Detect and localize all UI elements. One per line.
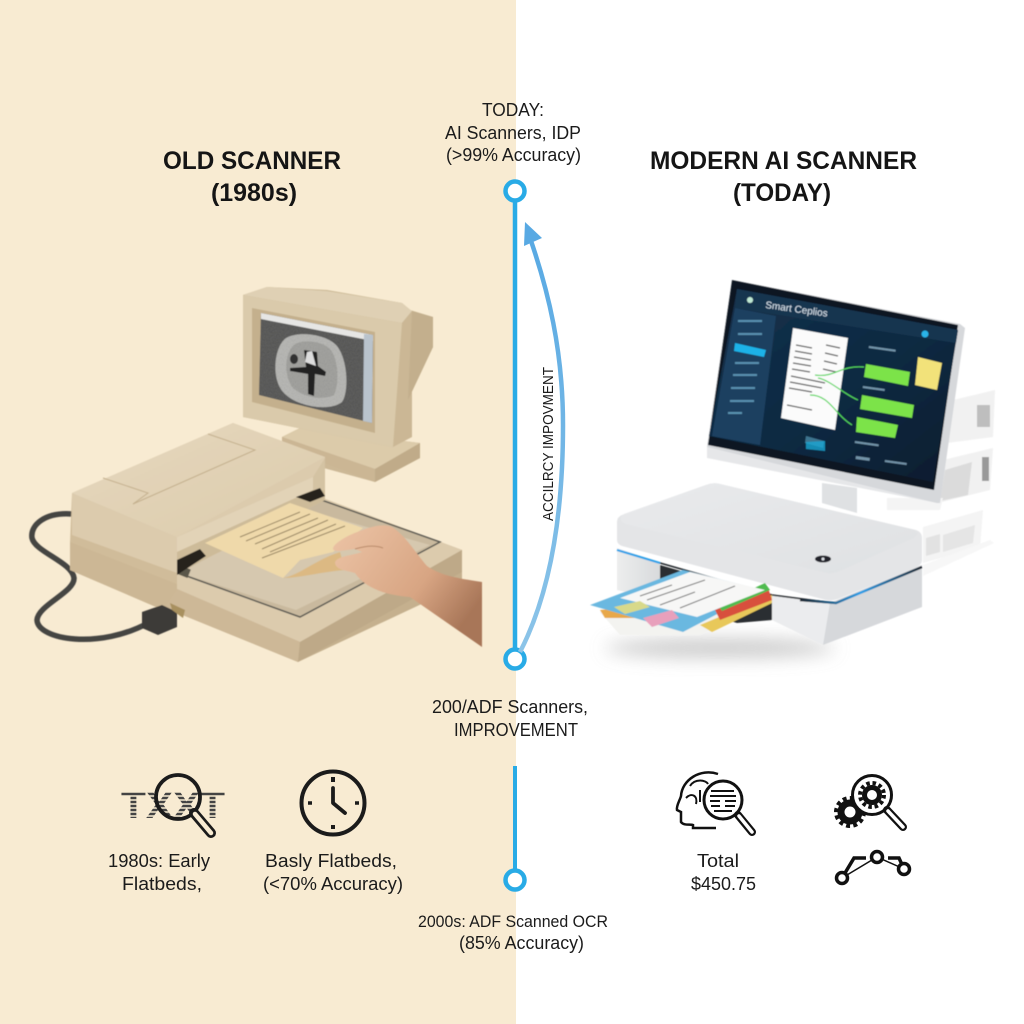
monitor screen UI: Smart Ceplios: [765, 300, 828, 320]
text: today milestone: [445, 100, 581, 165]
text: early flatbeds accuracy: (<70% Accuracy): [263, 874, 403, 894]
CRT monitor stand: [282, 428, 420, 482]
CRT screen: [259, 313, 373, 423]
text: early flatbeds accuracy: [263, 851, 403, 894]
heading: modern AI scanner: [650, 147, 917, 207]
text: total: $450.75: [691, 874, 756, 894]
document stack: [590, 570, 772, 635]
text: 1980s early flatbeds: Flatbeds,: [122, 874, 202, 894]
text: today milestone: TODAY:: [482, 100, 544, 120]
icon: gears magnifier: [836, 776, 903, 827]
CRT monitor: [243, 287, 433, 447]
paper document: [205, 503, 363, 578]
monitor stand: [822, 483, 857, 513]
arrow: accuracy improvement: [520, 222, 563, 652]
text: ADF improvement: IMPROVEMENT: [454, 720, 578, 740]
label: accuracy improvement: ACCILRCY IMPOVMENT: [540, 367, 557, 521]
monitor screen UI: [709, 289, 958, 482]
heading: modern AI scanner: (TODAY): [733, 179, 831, 207]
scanner head lower body: [70, 493, 177, 610]
hand: [333, 525, 482, 647]
timeline: lower segment: [506, 766, 524, 890]
icon: magnifier over scrambled text: [118, 775, 228, 833]
scanner base: [163, 497, 462, 662]
power cable: [32, 514, 150, 639]
glass platen: [170, 497, 440, 617]
heading: old scanner: (1980s): [211, 179, 297, 207]
text: ADF improvement: 200/ADF Scanners,: [432, 697, 588, 717]
illustration: modern AI scanner: [590, 280, 995, 658]
soft shadow: [605, 638, 835, 658]
icon: network line chart: [836, 852, 910, 884]
heading: old scanner: OLD SCANNER: [163, 147, 341, 175]
scanner lower body: [617, 548, 922, 645]
text: 2000s milestone: 2000s: ADF Scanned OCR: [418, 912, 608, 931]
ghost documents: [887, 390, 995, 576]
text: today milestone: (>99% Accuracy): [446, 145, 581, 165]
text: 1980s early flatbeds: [108, 851, 210, 894]
panel: modern scanner background: [516, 0, 1024, 1024]
timeline: upper axis: [506, 182, 524, 668]
text: ADF improvement: [432, 697, 588, 740]
illustration: old scanner and CRT: [32, 287, 482, 662]
scanner top: [617, 483, 922, 600]
icon: magnifier over scrambled text: TXXT: [121, 785, 225, 826]
text: total: [691, 851, 756, 894]
blue light strip: [617, 550, 922, 603]
text: 1980s early flatbeds: 1980s: Early: [108, 851, 210, 871]
text: 2000s milestone: (85% Accuracy): [459, 933, 584, 953]
text: total: Total: [697, 851, 739, 871]
monitor: [707, 280, 965, 503]
panel: old scanner background: [0, 0, 516, 1024]
heading: modern AI scanner: MODERN AI SCANNER: [650, 147, 917, 175]
text: early flatbeds accuracy: Basly Flatbeds,: [265, 851, 397, 871]
cable plug: [142, 603, 185, 635]
scanner head: [72, 423, 325, 575]
text: 2000s milestone: [418, 912, 608, 953]
heading: old scanner: [163, 147, 341, 207]
icon: clock: [302, 772, 364, 834]
text: today milestone: AI Scanners, IDP: [445, 123, 581, 143]
icon: AI brain magnifier: [677, 772, 752, 832]
